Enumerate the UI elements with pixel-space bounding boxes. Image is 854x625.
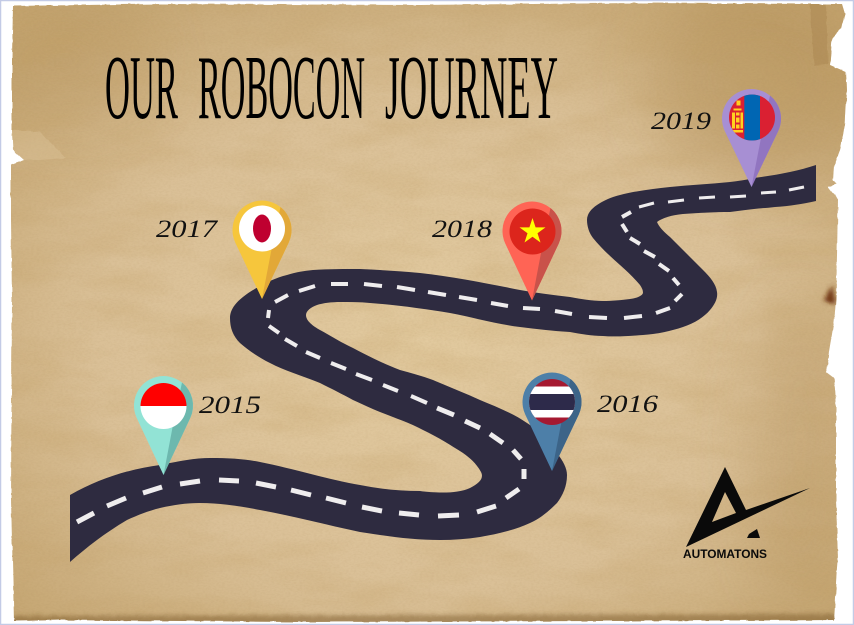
- title: ROBOCON: [198, 37, 365, 138]
- pin 2019: Mongolia flag: [722, 89, 781, 187]
- year label 2018: 2018: [432, 216, 493, 243]
- title: [105, 37, 558, 138]
- road centre dashes: [77, 187, 804, 522]
- year label 2019: 2019: [651, 108, 712, 135]
- year label 2016: 2016: [597, 391, 659, 418]
- year label 2015: 2015: [199, 392, 261, 419]
- pin 2017: Japan flag: [232, 201, 292, 299]
- title: OUR: [105, 37, 178, 138]
- logo: Automatons: [683, 467, 810, 561]
- year label 2017: 2017: [156, 216, 219, 243]
- pin 2018: Vietnam flag: [502, 202, 562, 300]
- road: [70, 165, 816, 562]
- pin 2015: Indonesia flag: [134, 376, 193, 475]
- pin 2016: Thailand flag: [522, 373, 582, 471]
- infographic: Our Robocon Journey: JOURNEY: [385, 37, 558, 138]
- logo: Automatons: AUTOMATONS: [683, 547, 767, 561]
